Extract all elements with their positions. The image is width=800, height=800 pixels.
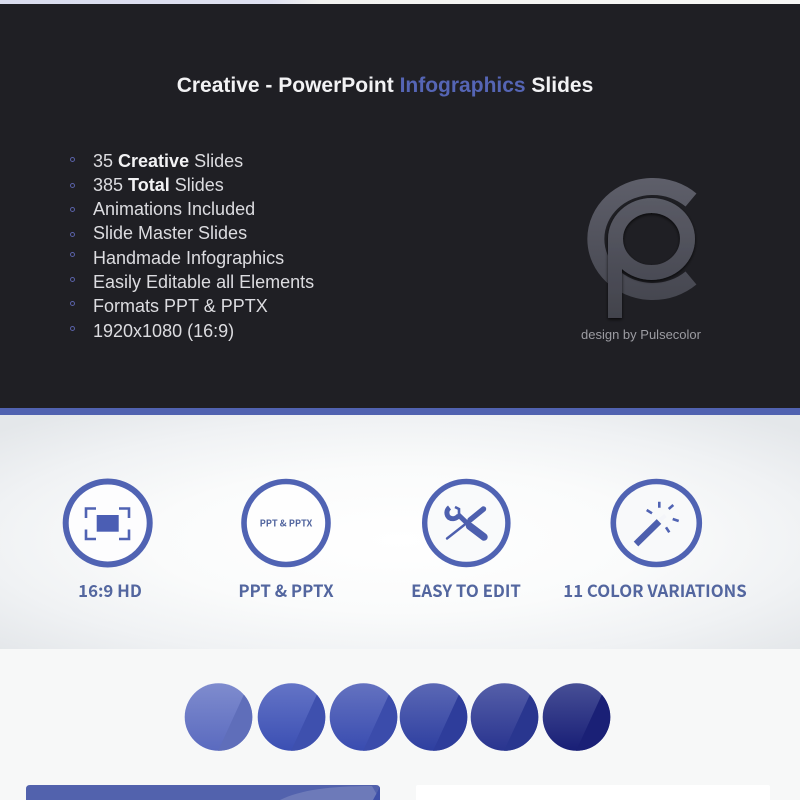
- label: 16:9 HD: 16:9 HD: [78, 578, 142, 602]
- icon: Pulsecolor logo: [587, 178, 696, 320]
- swatch 2: [257, 683, 327, 751]
- blue divider bar: [0, 408, 800, 415]
- feature list: 35 Creative Slides: [93, 151, 243, 171]
- icon: color variations: [610, 478, 702, 568]
- feature list: 1920x1080 (16:9): [93, 321, 234, 341]
- feature list: 385 Total Slides: [93, 175, 224, 195]
- panel: features band: [0, 415, 800, 649]
- label: color variations: 11 COLOR VARIATIONS: [563, 578, 747, 602]
- feature list: Slide Master Slides: [93, 223, 247, 243]
- feature list: [70, 151, 314, 341]
- swatch 5: [470, 683, 540, 751]
- icon: PPT and PPTX: [241, 478, 331, 568]
- swatch 3: [329, 683, 399, 751]
- title: Creative - PowerPoint Infographics Slides: [177, 74, 593, 97]
- swatch 6: [542, 683, 612, 751]
- icon: PPT and PPTX: PPT & PPTX: [260, 516, 313, 530]
- feature list: Easily Editable all Elements: [93, 272, 314, 292]
- label: PPT and PPTX: PPT & PPTX: [238, 578, 334, 602]
- panel: blue card: [26, 785, 380, 800]
- logo caption: design by Pulsecolor: [581, 327, 701, 342]
- panel: color swatches: [184, 683, 610, 751]
- panel: dark header: [0, 4, 800, 408]
- feature list: Formats PPT & PPTX: [93, 296, 268, 316]
- panel: white card: [416, 785, 770, 800]
- label: easy to edit: EASY TO EDIT: [411, 578, 521, 602]
- swatch 1: [184, 683, 254, 751]
- feature list: Handmade Infographics: [93, 248, 284, 268]
- icon: 16:9 HD: [62, 478, 153, 568]
- feature list: Animations Included: [93, 199, 255, 219]
- icon: easy to edit: [422, 478, 511, 568]
- swatch 4: [399, 683, 469, 751]
- top strip: [0, 0, 800, 4]
